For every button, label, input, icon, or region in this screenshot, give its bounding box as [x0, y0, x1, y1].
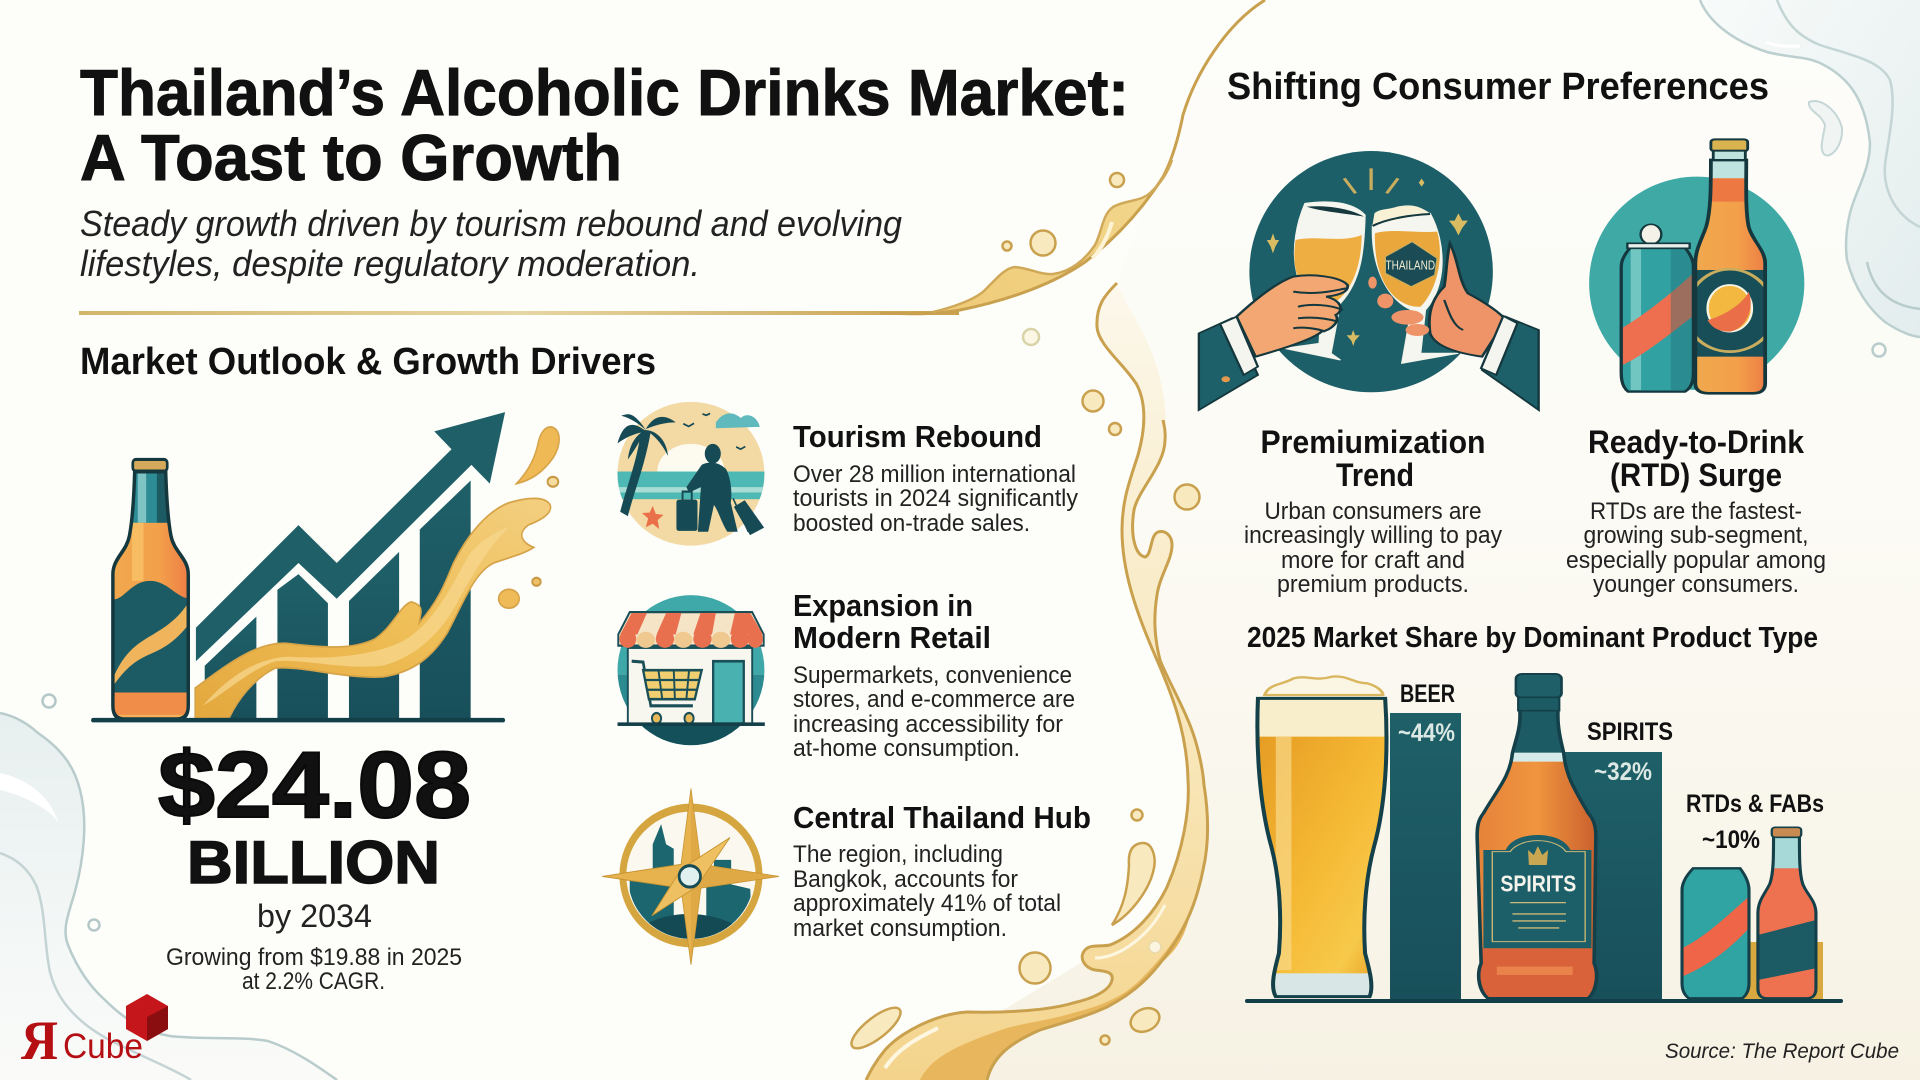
- text: expansion in modern retail: increasing accessibility for: [793, 711, 1063, 738]
- icon: modern retail store: [614, 594, 767, 751]
- text: tourism rebound: boosted on-trade sales.: [793, 510, 1030, 537]
- text: central thailand hub: market consumption.: [793, 915, 1007, 942]
- bars: [205, 480, 471, 719]
- bottle: [1692, 139, 1768, 395]
- heading: shifting consumer preferences: Shifting Consumer Preferences: [1227, 66, 1769, 108]
- logo: RCube: [21, 994, 168, 1072]
- stat: market value: [158, 732, 471, 995]
- icon: tourism: [614, 400, 767, 547]
- title: [80, 56, 1129, 194]
- left glass: [1284, 202, 1365, 360]
- gold splash: header divider: [79, 0, 1265, 315]
- spirits bottle: SPIRITS: [1500, 871, 1576, 897]
- heading: market outlook: Market Outlook & Growth Drivers: [80, 341, 656, 383]
- text: expansion in modern retail: Modern Retail: [793, 620, 991, 655]
- stat: market value: by 2034: [257, 898, 372, 934]
- title: Thailand’s Alcoholic Drinks Market:: [80, 56, 1129, 129]
- stat: market value: Growing from $19.88 in 2025: [166, 944, 462, 971]
- text: expansion in modern retail: stores, and e-commerce are: [793, 686, 1075, 713]
- labels: ~32%: [1594, 758, 1652, 786]
- text: RTD surge: growing sub-segment,: [1584, 522, 1808, 549]
- left hand and sleeve: [1199, 275, 1348, 410]
- logo: RCube: Cube: [63, 1027, 143, 1066]
- bars: [1390, 713, 1823, 1000]
- growth arrow: [196, 412, 505, 661]
- text: central thailand hub: The region, including: [793, 841, 1003, 868]
- stat: market value: at 2.2% CAGR.: [242, 968, 385, 995]
- right glass: THAILAND: [1386, 258, 1435, 273]
- text: central thailand hub: [793, 800, 1091, 942]
- stat: market value: $24.08: [158, 732, 471, 837]
- axis: [91, 718, 505, 722]
- axis: [1245, 999, 1843, 1003]
- text: expansion in modern retail: at-home consumption.: [793, 735, 1020, 762]
- gold droplets: [846, 173, 1200, 1055]
- text: expansion in modern retail: Expansion in: [793, 588, 973, 623]
- title: A Toast to Growth: [80, 121, 622, 194]
- text: premiumization trend: [1244, 424, 1502, 598]
- text: RTD surge: younger consumers.: [1593, 571, 1799, 598]
- text: premiumization trend: Trend: [1336, 457, 1414, 493]
- gold splash: central river: [866, 283, 1208, 1080]
- text: RTD surge: RTDs are the fastest-: [1590, 498, 1802, 525]
- labels: RTDs & FABs: [1686, 790, 1824, 818]
- heading: market share: 2025 Market Share by Dominant Product Type: [1247, 622, 1818, 654]
- water splash: bottom left: [0, 694, 337, 1080]
- subtitle: Steady growth driven by tourism rebound and evolving: [80, 203, 902, 244]
- labels: [1398, 680, 1824, 854]
- text: expansion in modern retail: Supermarkets, convenience: [793, 662, 1072, 689]
- subtitle: [80, 203, 902, 284]
- subtitle: lifestyles, despite regulatory moderation.: [80, 243, 700, 284]
- logo: RCube: Я: [21, 1010, 58, 1072]
- source: Source: The Report Cube: [1665, 1040, 1899, 1063]
- text: expansion in modern retail: [793, 588, 1075, 762]
- icon: central hub compass: [602, 788, 779, 965]
- text: premiumization trend: Urban consumers are: [1264, 498, 1482, 525]
- beer glass: [1251, 676, 1390, 1000]
- text: tourism rebound: Tourism Rebound: [793, 419, 1042, 454]
- icon: premiumization toast: [1199, 151, 1539, 410]
- RTD can: [1680, 867, 1751, 1000]
- text: RTD surge: especially popular among: [1566, 547, 1826, 574]
- water splash: top right: [1700, 0, 1920, 356]
- chart: market share by product: [1245, 674, 1843, 1003]
- icon: RTD can and bottle: [1589, 139, 1804, 395]
- beer splash: [195, 427, 559, 719]
- text: central thailand hub: Central Thailand Hub: [793, 800, 1091, 835]
- can: [1619, 224, 1697, 393]
- text: RTD surge: [1566, 424, 1826, 598]
- labels: ~44%: [1398, 719, 1455, 747]
- text: central thailand hub: approximately 41% of total: [793, 890, 1061, 917]
- beer bottle: [111, 459, 191, 721]
- text: RTD surge: Ready-to-Drink: [1588, 424, 1804, 460]
- text: premiumization trend: Premiumization: [1260, 424, 1486, 460]
- text: central thailand hub: Bangkok, accounts for: [793, 866, 1018, 893]
- text: RTD surge: (RTD) Surge: [1610, 457, 1782, 493]
- text: tourism rebound: tourists in 2024 significantly: [793, 485, 1078, 512]
- text: tourism rebound: Over 28 million international: [793, 461, 1076, 488]
- small bottle: [1756, 827, 1818, 1002]
- chart: bottle, rising bars and arrow: [91, 412, 559, 722]
- stat: market value: BILLION: [187, 829, 440, 896]
- spirits bottle: [1474, 674, 1599, 1000]
- labels: SPIRITS: [1587, 718, 1673, 746]
- right hand and sleeve: [1368, 243, 1539, 410]
- text: premiumization trend: increasingly willing to pay: [1244, 522, 1502, 549]
- labels: BEER: [1400, 680, 1455, 708]
- right glass: [1372, 205, 1458, 363]
- text: premiumization trend: premium products.: [1277, 571, 1469, 598]
- text: premiumization trend: more for craft and: [1281, 547, 1465, 574]
- text: tourism rebound: [793, 419, 1078, 537]
- labels: ~10%: [1702, 826, 1760, 854]
